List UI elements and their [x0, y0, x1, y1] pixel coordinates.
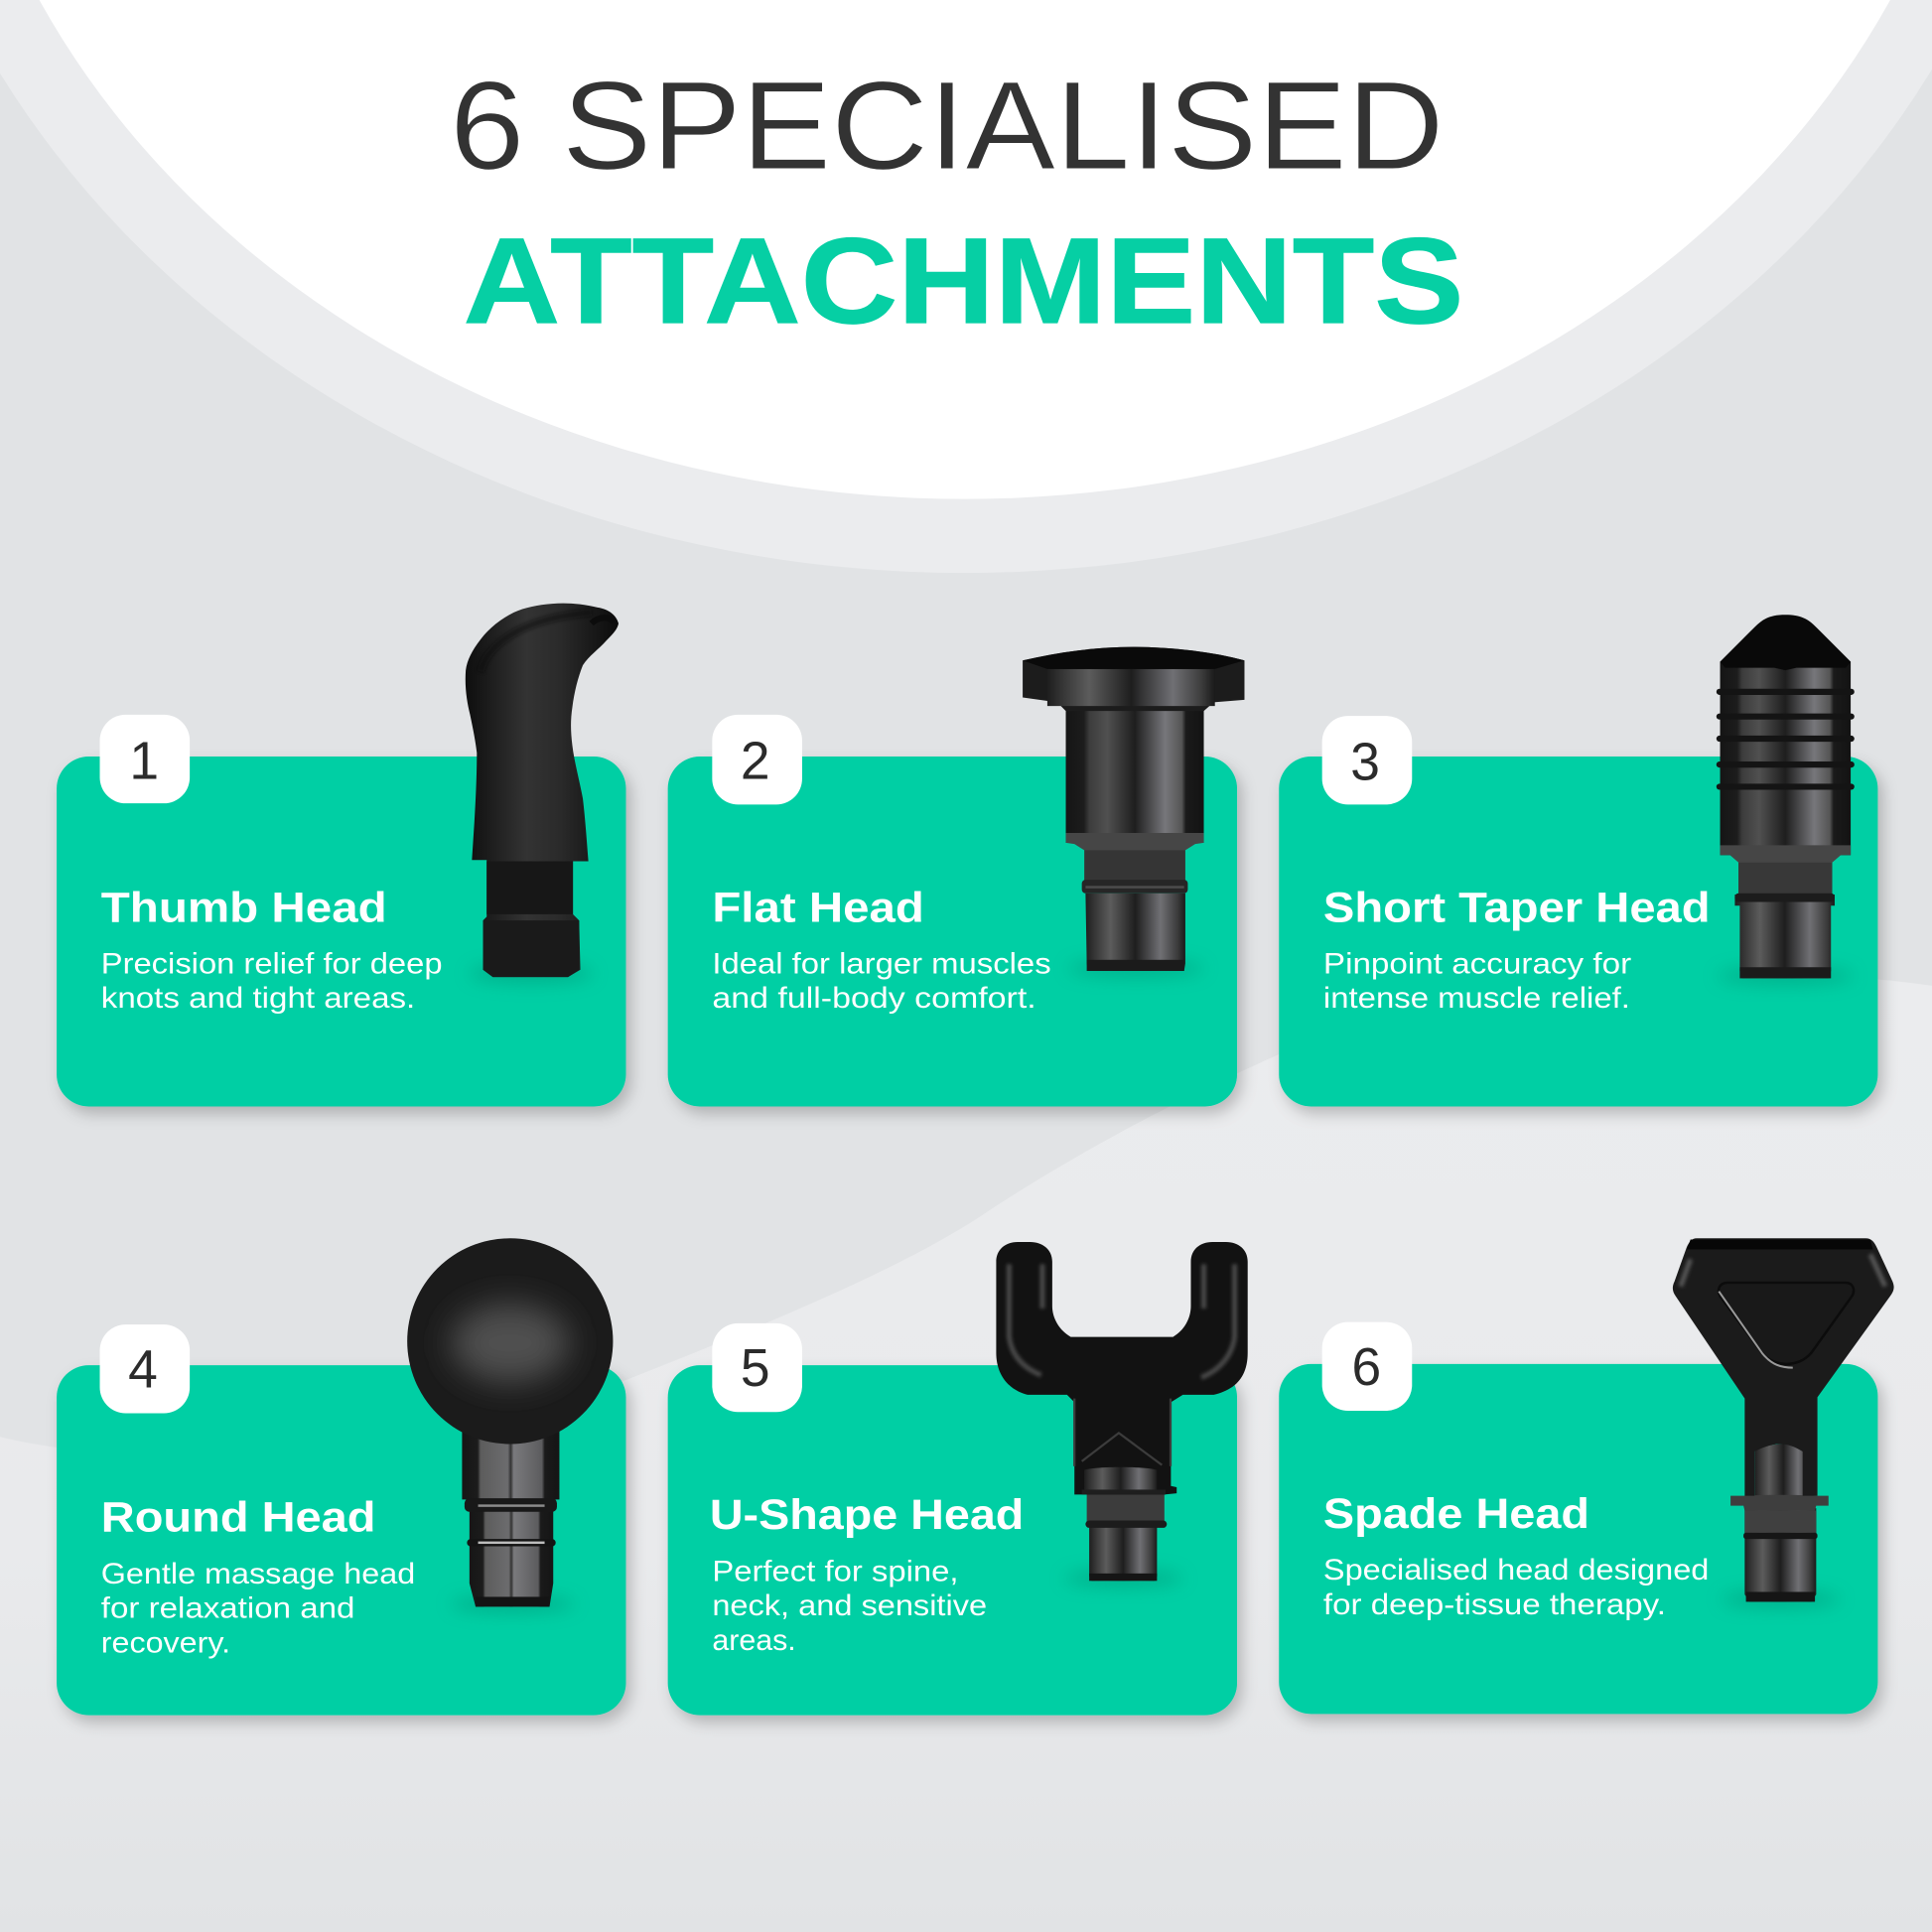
description: recovery.: [101, 1627, 230, 1659]
icon: spade attachment: [1673, 1238, 1894, 1608]
number badge: 4: [128, 1340, 158, 1399]
panel: spade head: [1279, 1238, 1894, 1714]
panel: round head: [57, 1238, 625, 1716]
heading: Short Taper Head: [1323, 884, 1711, 930]
panel: short taper head: [1279, 615, 1877, 1106]
description: [1323, 948, 1632, 1015]
description: intense muscle relief.: [1323, 983, 1630, 1015]
card background: [57, 1365, 625, 1716]
description: Pinpoint accuracy for: [1323, 948, 1632, 980]
description: neck, and sensitive: [712, 1590, 987, 1622]
background lighter swoosh: [0, 972, 1932, 1932]
number badge: [1322, 1322, 1412, 1411]
heading: Flat Head: [712, 884, 924, 930]
description: [101, 1559, 415, 1659]
number badge: 6: [1352, 1338, 1381, 1397]
card background: [668, 757, 1237, 1106]
description: for relaxation and: [101, 1593, 354, 1625]
description: Gentle massage head: [101, 1559, 415, 1590]
number badge: [712, 715, 802, 804]
icon: flat attachment: [1023, 647, 1244, 977]
inner white header arc: [0, 0, 1932, 499]
icon: short taper attachment: [1717, 615, 1855, 985]
description: for deep-tissue therapy.: [1323, 1589, 1666, 1621]
heading: U-Shape Head: [710, 1491, 1024, 1538]
heading: Round Head: [101, 1494, 376, 1541]
number badge: 3: [1350, 734, 1380, 792]
panel: u-shape head: [668, 1242, 1248, 1716]
number badge: [100, 1324, 190, 1414]
number badge: 5: [741, 1339, 770, 1398]
icon: u-shape attachment: [996, 1242, 1248, 1587]
description: [712, 948, 1051, 1015]
number badge: [712, 1323, 802, 1412]
panel: flat head: [668, 647, 1244, 1106]
card background: [1279, 757, 1877, 1106]
description: Specialised head designed: [1323, 1555, 1709, 1587]
description: Precision relief for deep: [101, 948, 443, 980]
description: [712, 1556, 987, 1657]
icon: thumb attachment: [466, 604, 619, 983]
panel: thumb head: [57, 604, 625, 1106]
description: areas.: [712, 1625, 796, 1657]
card background: [668, 1365, 1237, 1716]
description: [1323, 1555, 1709, 1621]
description: Ideal for larger muscles: [712, 948, 1051, 980]
description: Perfect for spine,: [712, 1556, 959, 1587]
title: [450, 55, 1463, 349]
icon: round attachment: [407, 1238, 613, 1613]
heading: Spade Head: [1323, 1490, 1589, 1537]
title line 2: ATTACHMENTS: [464, 213, 1463, 349]
number badge: [100, 715, 190, 803]
outer header arc: [0, 0, 1932, 573]
card background: [57, 757, 625, 1106]
description: knots and tight areas.: [101, 983, 415, 1015]
description: and full-body comfort.: [712, 983, 1036, 1015]
number badge: 2: [741, 732, 770, 790]
heading: Thumb Head: [101, 884, 387, 930]
title line 1: 6 SPECIALISED: [450, 55, 1445, 196]
number badge: [1322, 716, 1412, 804]
card background: [1279, 1364, 1877, 1714]
number badge: 1: [129, 732, 159, 790]
description: [101, 948, 443, 1015]
